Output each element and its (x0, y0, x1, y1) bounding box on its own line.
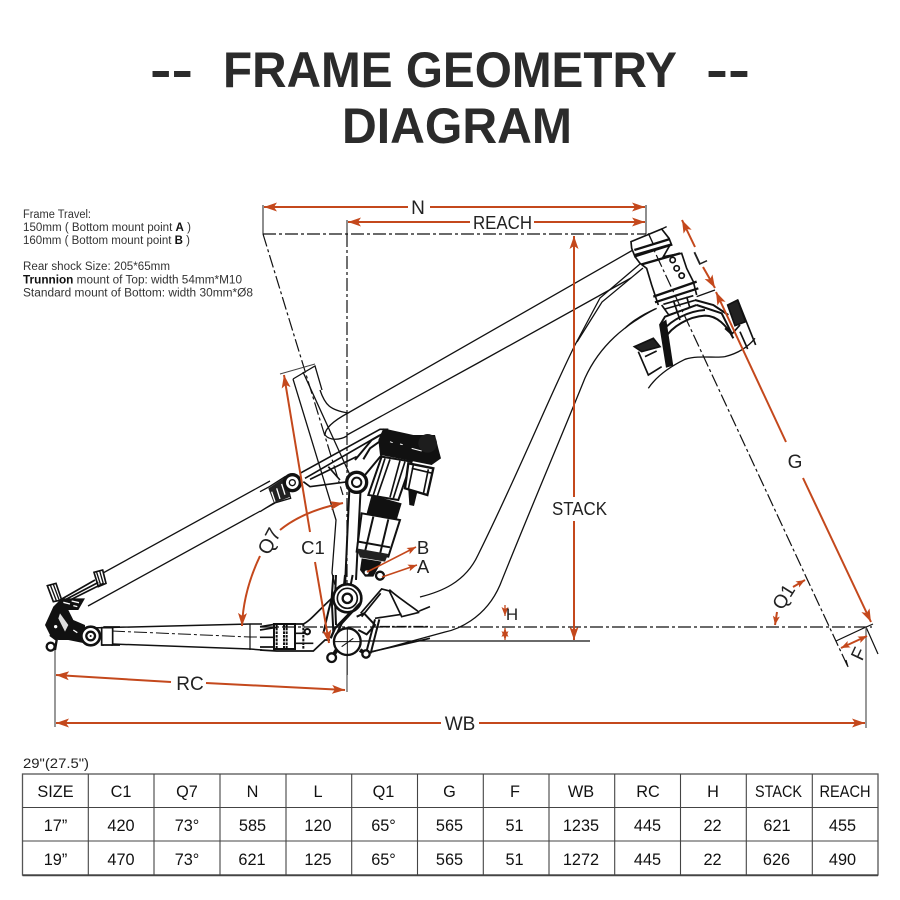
notes: frame travel and rear shock (23, 209, 253, 300)
dimension arrow: H: H (506, 605, 518, 624)
table row 19 inch: 621 (238, 851, 266, 869)
table header row: N (247, 783, 258, 801)
dimension arrow: L (682, 220, 715, 288)
icon: rocker link (260, 429, 388, 512)
table row 17 inch: 65° (371, 817, 396, 835)
table row 19 inch: 65° (371, 851, 396, 869)
angle label: Q7: Q7 (254, 525, 286, 558)
wheel size note: 29"(27.5") (23, 756, 89, 771)
angle label: Q7 (242, 503, 343, 626)
table header row: RC (636, 783, 660, 801)
table header row: SIZE (37, 783, 74, 801)
dimension arrow: L: L (691, 246, 710, 270)
table row 19 inch: 470 (107, 851, 135, 869)
table row 19 inch: 51 (505, 851, 524, 869)
notes: frame travel and rear shock: 150mm ( Bottom mount point A ) (23, 222, 191, 234)
dimension arrow: STACK (551, 236, 608, 640)
table header row: Q1 (373, 783, 394, 801)
table row 17 inch: 420 (107, 817, 135, 835)
dimension arrow: STACK: STACK (552, 498, 608, 519)
frame: chain stay (90, 624, 262, 650)
notes: frame travel and rear shock: Rear shock Size: 205*65mm (23, 261, 170, 273)
table row 17 inch: 621 (763, 817, 791, 835)
table header row: REACH (820, 783, 870, 801)
table row 19 inch (44, 851, 856, 869)
table row 17 inch: 585 (239, 817, 266, 835)
dimension arrow: G: G (788, 452, 802, 473)
table row 19 inch: 445 (634, 851, 661, 869)
dimension arrow: F: F (847, 645, 871, 664)
table row 19 inch: 1272 (563, 851, 599, 869)
angle label: Q1 (769, 580, 805, 625)
table row 19 inch: 626 (763, 851, 790, 869)
shock mount arrows: A and B: A (417, 556, 430, 577)
title: DIAGRAM (342, 98, 572, 154)
table row 17 inch: 445 (634, 817, 661, 835)
geometry table (22, 774, 878, 875)
icon: head tube, fork crown and front tyre (625, 227, 756, 388)
angle label: Q1: Q1 (769, 581, 800, 614)
table row 19 inch: 19” (44, 851, 67, 869)
table row 19 inch: 73° (175, 851, 199, 869)
shock mount arrows: A and B: B (417, 537, 429, 558)
dimension arrow: REACH: REACH (473, 212, 532, 233)
table row 17 inch: 22 (703, 817, 722, 835)
notes: frame travel and rear shock: Frame Travel: (23, 209, 91, 221)
frame: seat stay (88, 481, 275, 606)
icon: rear shock (345, 428, 441, 587)
table row 17 inch (44, 817, 856, 835)
dimension arrow: G (716, 292, 871, 622)
geometry construction lines (55, 205, 878, 728)
dimension arrow: RC: RC (176, 674, 204, 695)
title: -- (706, 42, 750, 98)
dimension arrow: C1 (280, 364, 329, 643)
icon: lower link and bottom bracket (260, 575, 430, 675)
table row 17 inch: 120 (304, 817, 332, 835)
title: FRAME GEOMETRY (223, 42, 677, 98)
title: -- (150, 42, 193, 98)
icon: rear dropout and axle (45, 570, 120, 651)
table header row: F (510, 783, 520, 801)
table row 17 inch: 73° (175, 817, 199, 835)
notes: frame travel and rear shock: 160mm ( Bottom mount point B ) (23, 235, 190, 247)
notes: frame travel and rear shock: Standard mount of Bottom: width 30mm*Ø8 (23, 288, 253, 300)
table row 17 inch: 51 (505, 817, 524, 835)
dimension arrow: C1: C1 (301, 537, 325, 558)
table row 19 inch: 565 (436, 851, 463, 869)
frame: top tube and down tube (293, 250, 655, 652)
table header row (37, 783, 870, 801)
dimension arrow: F (841, 636, 871, 664)
table row 19 inch: 125 (304, 851, 332, 869)
shock mount arrows: A and B (367, 537, 430, 577)
table header row: WB (568, 783, 594, 801)
table row 17 inch: 565 (436, 817, 463, 835)
table header row: G (443, 783, 456, 801)
dimension arrow: WB: WB (445, 714, 475, 735)
table header row: C1 (111, 783, 131, 801)
table row 17 inch: 17” (44, 817, 67, 835)
table header row: Q7 (176, 783, 198, 801)
table row 17 inch: 1235 (563, 817, 599, 835)
table header row: STACK (755, 783, 802, 801)
table header row: H (707, 783, 719, 801)
table row 19 inch: 22 (703, 851, 722, 869)
dimension arrow: N: N (411, 198, 425, 219)
table row 19 inch: 490 (829, 851, 856, 869)
dimension arrow: H (505, 605, 518, 640)
table header row: L (313, 783, 323, 801)
notes: frame travel and rear shock: Trunnion mount of Top: width 54mm*M10 (23, 274, 242, 286)
dimension arrow: RC (56, 674, 345, 695)
table row 17 inch: 455 (829, 817, 856, 835)
title (150, 42, 750, 154)
